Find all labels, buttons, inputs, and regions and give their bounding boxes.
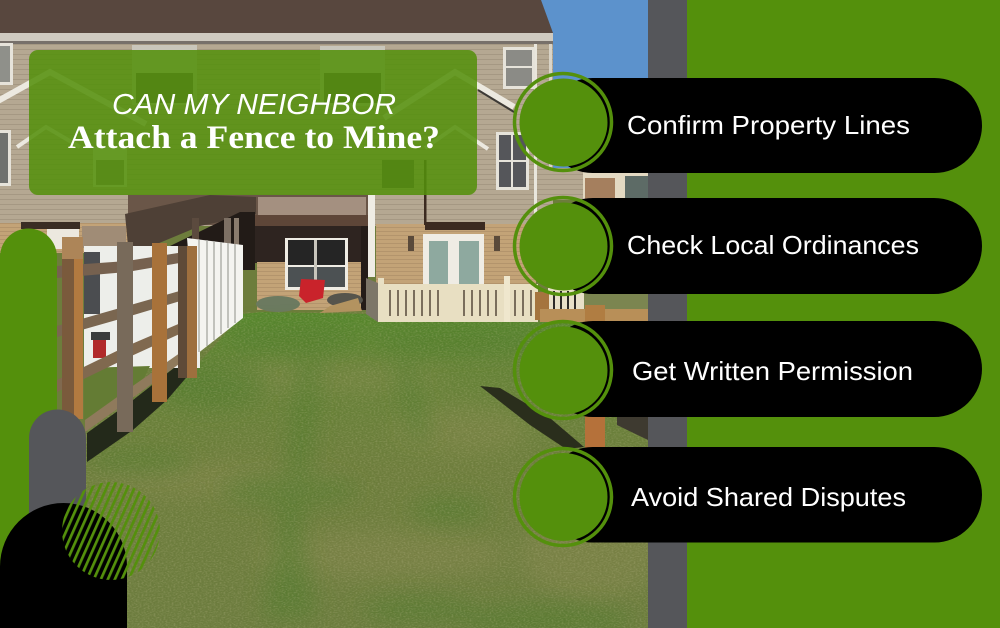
step 1: confirm property lines: Confirm Property Lines	[627, 110, 910, 140]
photo: split-rail wood fence	[57, 237, 197, 432]
left decoration: grey rounded column	[29, 410, 86, 628]
photo: lower storey brick and dark openings	[0, 160, 536, 310]
background photo: backyard with house and fence	[0, 0, 660, 628]
step 4: avoid shared disputes	[514, 447, 982, 546]
photo: deck and stairs	[82, 195, 368, 270]
left decoration: black arch	[0, 503, 127, 628]
right panel: grey stripe	[648, 0, 687, 628]
photo: shadow along wood fence	[87, 368, 186, 462]
title panel	[29, 50, 477, 195]
right panel: green background	[687, 0, 1000, 628]
photo: sky	[540, 0, 648, 175]
photo: distant house	[583, 172, 648, 200]
step 3: get written permission	[514, 321, 982, 418]
step 2: check local ordinances	[514, 198, 982, 294]
photo: rail fence at right	[535, 288, 648, 449]
photo: french doors	[408, 234, 500, 284]
left decoration: green rounded column	[0, 228, 57, 628]
step 2: check local ordinances: Check Local Ordinances	[627, 230, 919, 260]
photo: lawn	[85, 312, 660, 628]
photo: ground floor window	[285, 238, 348, 290]
photo: roof	[0, 0, 553, 44]
photo: red wheelbarrow and garden stones	[256, 279, 363, 313]
left decoration: hatched circle	[62, 482, 160, 580]
title line 2: Attach a Fence to Mine?	[68, 120, 440, 156]
photo: tree shadow on lawn	[480, 386, 584, 449]
photo: upper windows	[0, 43, 535, 190]
step 1: confirm property lines	[514, 74, 982, 173]
title line 1: CAN MY NEIGHBOR	[112, 89, 396, 121]
photo: white picket fence	[366, 276, 538, 322]
step 4: avoid shared disputes: Avoid Shared Disputes	[631, 482, 906, 512]
photo: gable trim	[0, 72, 514, 149]
photo: house siding	[0, 44, 583, 226]
step 3: get written permission: Get Written Permission	[632, 356, 913, 386]
photo: white vinyl fence	[84, 238, 243, 420]
